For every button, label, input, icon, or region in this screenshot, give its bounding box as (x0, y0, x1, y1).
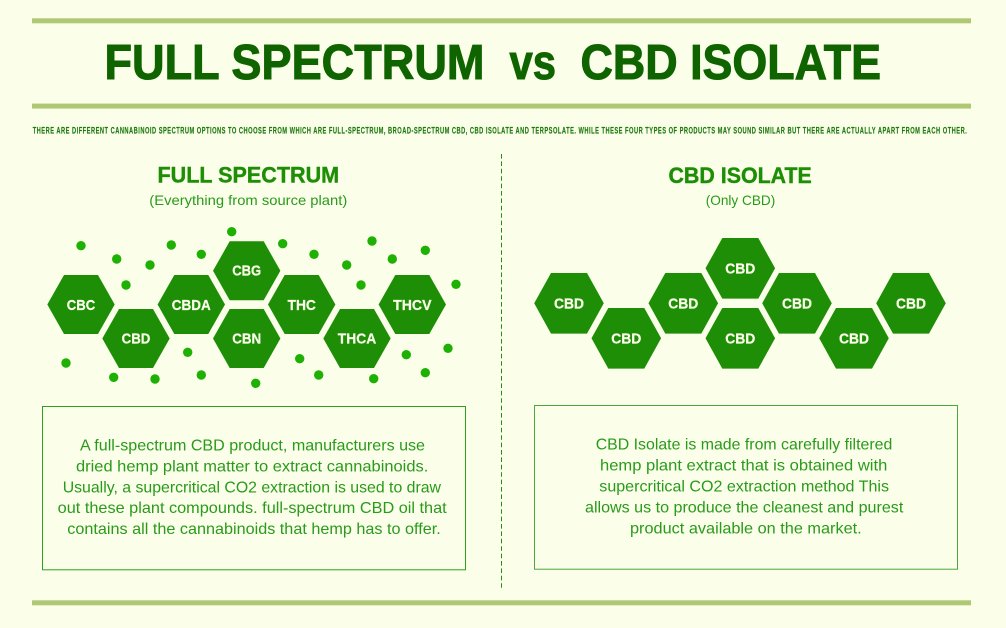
title: FULL SPECTRUM (104, 36, 484, 90)
text box: full spectrum description: out these plant compounds. full-spectrum CBD oil that (58, 500, 447, 517)
hexagon: CBDA (158, 275, 225, 334)
hexagon: CBD 1: CBD (554, 295, 584, 312)
hexagon: THCV: THCV (393, 297, 431, 314)
text box: CBD isolate description: supercritical CO2 extraction method This (599, 478, 889, 495)
text box: full spectrum description: dried hemp plant matter to extract cannabinoids. (76, 458, 428, 476)
text box: CBD isolate description: product available on the market. (630, 520, 862, 537)
text box: CBD isolate description: hemp plant extract that is obtained with (600, 457, 887, 474)
hexagon: CBD 5: CBD (725, 330, 755, 347)
hexagon: CBD 7 (819, 308, 889, 369)
hexagon: CBD 4: CBD (725, 260, 755, 277)
hexagon: THC: THC (288, 297, 316, 314)
hexagon: THCA (323, 309, 391, 368)
title: vs (510, 36, 556, 90)
divider: dashed centre line (500, 154, 502, 590)
text box: full spectrum description (42, 406, 466, 570)
hexagon: CBD 2: CBD (611, 330, 641, 347)
hexagon: CBD 2 (592, 308, 661, 369)
text box: full spectrum description: contains all the cannabinoids that hemp has to offer. (67, 521, 441, 538)
hexagon: CBD 6: CBD (782, 295, 812, 312)
hexagon: THCA: THCA (338, 330, 376, 348)
hexagon: CBG (213, 241, 280, 300)
panel: CBD isolate (534, 163, 958, 569)
hexagon: THCV (379, 275, 446, 334)
text box: CBD isolate description (534, 406, 958, 569)
hexagon: CBD 1 (534, 273, 604, 334)
hexagon: CBD 4 (706, 238, 775, 299)
heading: full spectrum: FULL SPECTRUM (158, 163, 339, 188)
hexagon: CBD 7: CBD (839, 330, 869, 347)
hexagon: CBD 5 (706, 308, 775, 369)
hexagon: CBD (102, 309, 170, 368)
text box: CBD isolate description: CBD Isolate is made from carefully filtered (596, 436, 892, 453)
hexagon: CBD 3: CBD (668, 295, 698, 312)
hexagon: CBDA: CBDA (172, 297, 211, 314)
hexagon: CBG: CBG (232, 263, 261, 280)
panel: full spectrum (42, 163, 466, 570)
hexagon: CBC (47, 275, 115, 334)
title: CBD ISOLATE (580, 36, 881, 90)
text box: CBD isolate description: allows us to produce the cleanest and purest (585, 499, 904, 516)
scattered cannabinoid dots (61, 227, 461, 388)
hexagon: CBD 6 (762, 273, 832, 334)
hexagon: CBD 8: CBD (896, 295, 926, 312)
hexagon: CBD: CBD (122, 330, 150, 348)
title (104, 36, 881, 90)
text box: full spectrum description: A full-spectrum CBD product, manufacturers use (80, 438, 425, 455)
subheading: only CBD: (Only CBD) (706, 192, 775, 208)
hexagon: CBN: CBN (232, 330, 261, 348)
text box: full spectrum description: Usually, a supercritical CO2 extraction is used to draw (63, 479, 441, 496)
subheading: everything from source plant: (Everything from source plant) (149, 192, 347, 208)
hexagon: CBC: CBC (67, 297, 95, 314)
hexagon: CBD 3 (648, 273, 718, 334)
hexagon: CBD 8 (876, 273, 946, 334)
heading: CBD isolate: CBD ISOLATE (668, 163, 812, 188)
hexagon: THC (268, 275, 335, 334)
hexagon: CBN (213, 309, 280, 368)
